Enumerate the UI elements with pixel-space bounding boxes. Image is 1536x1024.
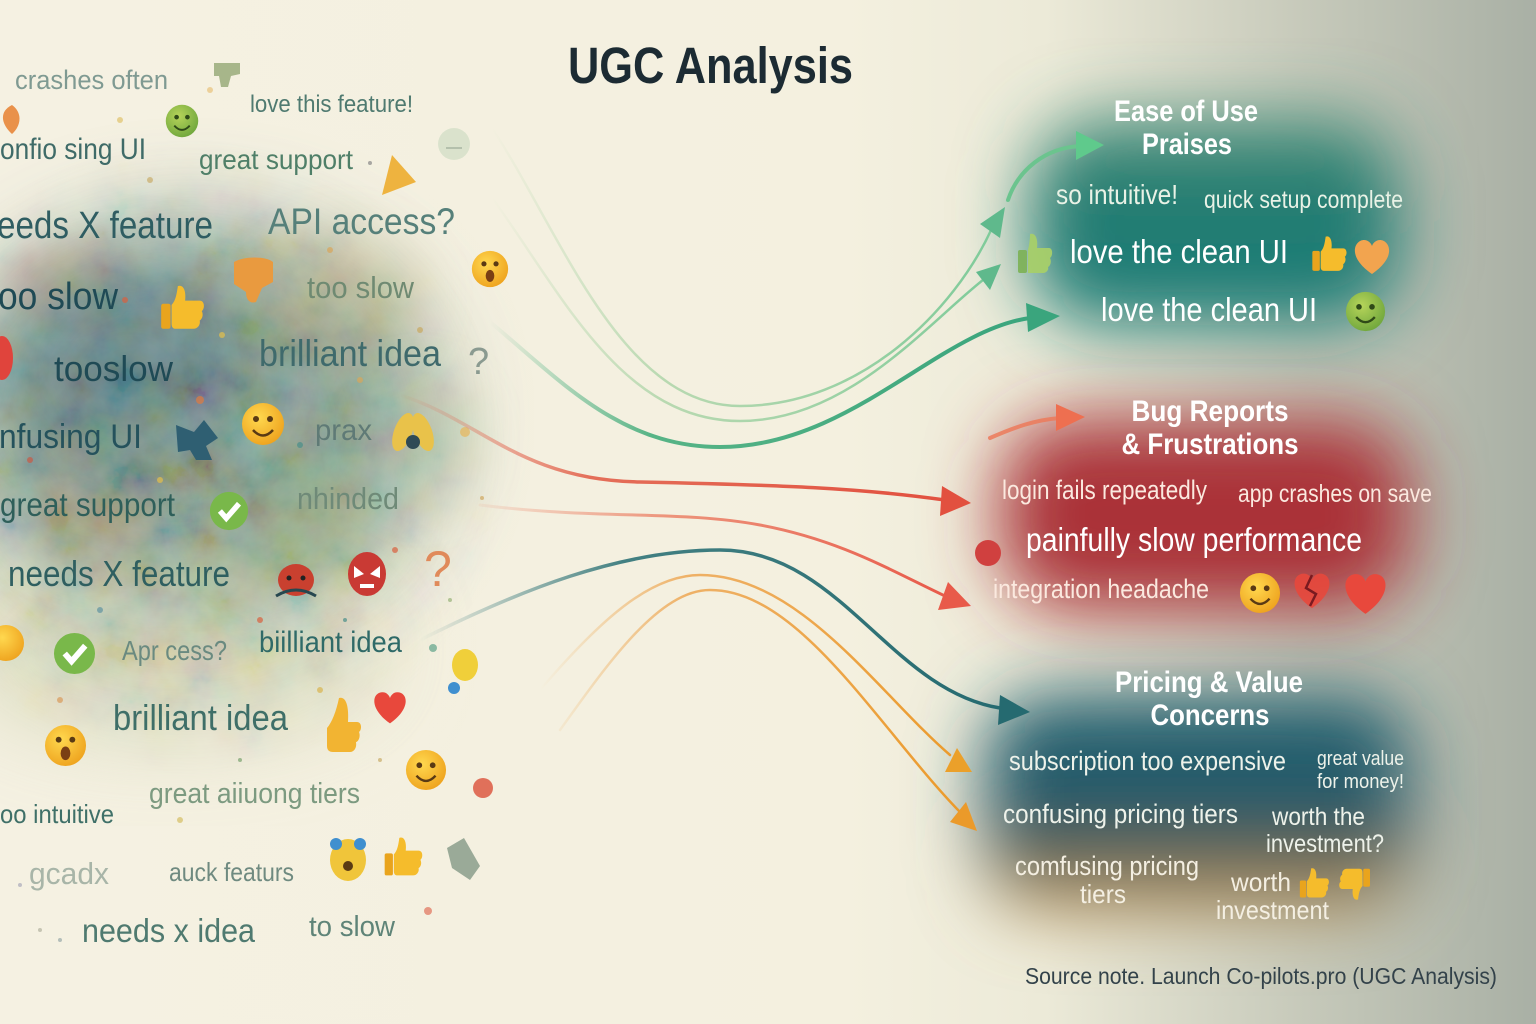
feedback: brilliant idea lower: brilliant idea [113,697,289,738]
feedback: biilliant idea: biilliant idea [259,626,402,659]
feedback: love this feature: love this feature! [250,91,413,118]
quote: investment?: investment? [1266,830,1384,858]
icon: blue yellow thumbs up [1312,236,1347,271]
arrow: peach to red [480,505,971,610]
icon: red blob at edge [0,336,13,380]
feedback: API access: API access? [268,201,455,242]
heading line 2: Concerns [1150,699,1270,732]
feedback: quick feature: auck featurs [169,857,294,887]
heading: ease of use praises: Ease of Use [1114,95,1258,128]
icon: crying face at edge [0,625,24,661]
panel background: blue orange blob [985,695,1410,910]
feedback: needs X feature: eeds X feature [0,205,213,247]
icon: wink face [406,750,446,790]
quote: for money: for money! [1317,771,1404,793]
cloud grain texture [0,189,448,744]
quote: comfusing pricing: comfusing pricing [1015,851,1199,881]
feedback: crashes often: crashes often [15,65,168,95]
icon: check green [210,492,248,530]
icon: faded thumbs down [214,63,240,87]
icon: party popper [382,155,416,195]
icon: small orange drop [3,105,19,134]
icon: dark red angry [276,564,316,596]
icon: faded face [438,128,470,160]
icon: check large [54,633,95,674]
quote: tiers: tiers [1080,879,1126,909]
feedback: brilliant idea: brilliant idea [259,333,441,374]
feedback: needs x idea: needs x idea [82,912,256,949]
arrow: red top flourish [990,404,1085,438]
arrow: teal [420,550,1030,725]
quote: confusing pricing tiers: confusing pricing tiers [1003,799,1238,829]
icon: wow face lower [45,725,86,766]
icon: smile [242,403,284,445]
quote: app crashes on save: app crashes on save [1238,480,1432,508]
arrow: top green flourish [1008,131,1104,200]
icon: red mask [348,552,386,596]
quote: quick setup complete: quick setup complete [1204,186,1403,214]
feedback: prax: prax [315,414,372,447]
feedback: too slow right: too slow [307,270,415,305]
feedback: great aliong tiers: great aiiuong tiers [149,778,360,810]
quote: investment: investment [1216,895,1330,925]
feedback: question mark: ? [468,341,489,383]
quote: painfully slow performance: painfully slow performance [1026,521,1362,558]
icon: wink face [1240,573,1280,613]
arrow: green strong [490,303,1060,447]
icon: broken heart [1295,574,1329,608]
arrow: orange upper [540,575,972,772]
feedback: confusing UI lower: nfusing UI [0,418,142,456]
icon: orange question mark: ? [424,541,452,597]
icon: green smile [166,105,198,137]
feedback: great support: great support [199,144,353,175]
icon: yellow and blue dots [448,649,478,694]
heading: bug reports: Bug Reports [1132,395,1288,428]
arrow: orange lower [560,590,977,831]
feedback: to slow: to slow [309,911,396,943]
feedback: API access lower: Apr cess? [122,635,227,666]
arrow: light green middle [490,195,1001,421]
icon: thumbs down orange [234,258,273,303]
quote: login fails repeatedly: login fails repeatedly [1002,475,1207,505]
panel background: teal blob [1030,120,1400,325]
heading line 2: Praises [1142,128,1232,161]
icon: red heart [1345,574,1386,614]
feedback: tooslow: tooslow [54,348,174,389]
icon: coral balloon [473,778,493,798]
feedback: gradx: gcadx [29,856,109,891]
heading line 2: & Frustrations [1122,428,1298,461]
quote: so intuitive: so intuitive! [1056,179,1178,210]
panel: bug reports and frustrations [975,395,1432,614]
icon: bee face lower [330,838,366,881]
arrow: light green top [490,125,1005,406]
arrows: flows from cloud to clusters [400,125,1104,831]
emoji scattered over the cloud [0,63,508,881]
quote: worth the: worth the [1271,803,1365,831]
feedback: nhinded: nhinded [297,481,399,516]
quote: subscription too expensive: subscription too expensive [1009,746,1286,776]
icon: heart [374,692,406,723]
quote: integration headache: integration headache [993,574,1209,604]
icon: wow face [472,251,508,287]
panel: ease of use praises [1018,95,1403,331]
icon: thumbs up small [1300,868,1329,897]
icon: green thumbs up [1018,234,1052,273]
icon: thumbs up bottom [385,838,422,875]
panel: pricing and value concerns [985,666,1410,925]
feedback: needs X feature lower: needs X feature [8,553,230,594]
icon: thumbs down small [1339,869,1370,900]
quote: worth: worth [1230,867,1291,897]
feedback: confusing UI: onfio sing UI [0,133,146,166]
feedback: too intuitive: oo intuitive [0,799,114,829]
quote: love the clean UI: love the clean UI [1070,233,1288,270]
icon: dark butterfly [176,420,218,460]
icon: red dot [975,540,1001,566]
speckles [18,87,484,942]
icon: green smile right [1346,292,1385,331]
quote: great value: great value [1317,748,1404,770]
title: UGC Analysis [568,37,853,94]
feedback: great support lower: great support [0,486,175,523]
feedback word cloud [0,65,489,949]
panel background: red blob [1000,420,1410,610]
quote: love the clean UI second: love the clean UI [1101,291,1317,328]
icon: thumbs up [161,286,204,329]
icon: thumbs up lower [327,698,361,752]
source note: Source note. Launch Co-pilots.pro (UGC Analysis) [1025,963,1497,989]
icon: orange heart [1355,240,1389,274]
cloud: blurred feedback mass [0,225,470,730]
icon: faded handshake [447,838,480,880]
icon: bee face [388,410,438,454]
arrow: red first [400,395,971,516]
feedback: too slow left: oo slow [0,276,119,318]
heading: pricing and value: Pricing & Value [1115,666,1303,699]
